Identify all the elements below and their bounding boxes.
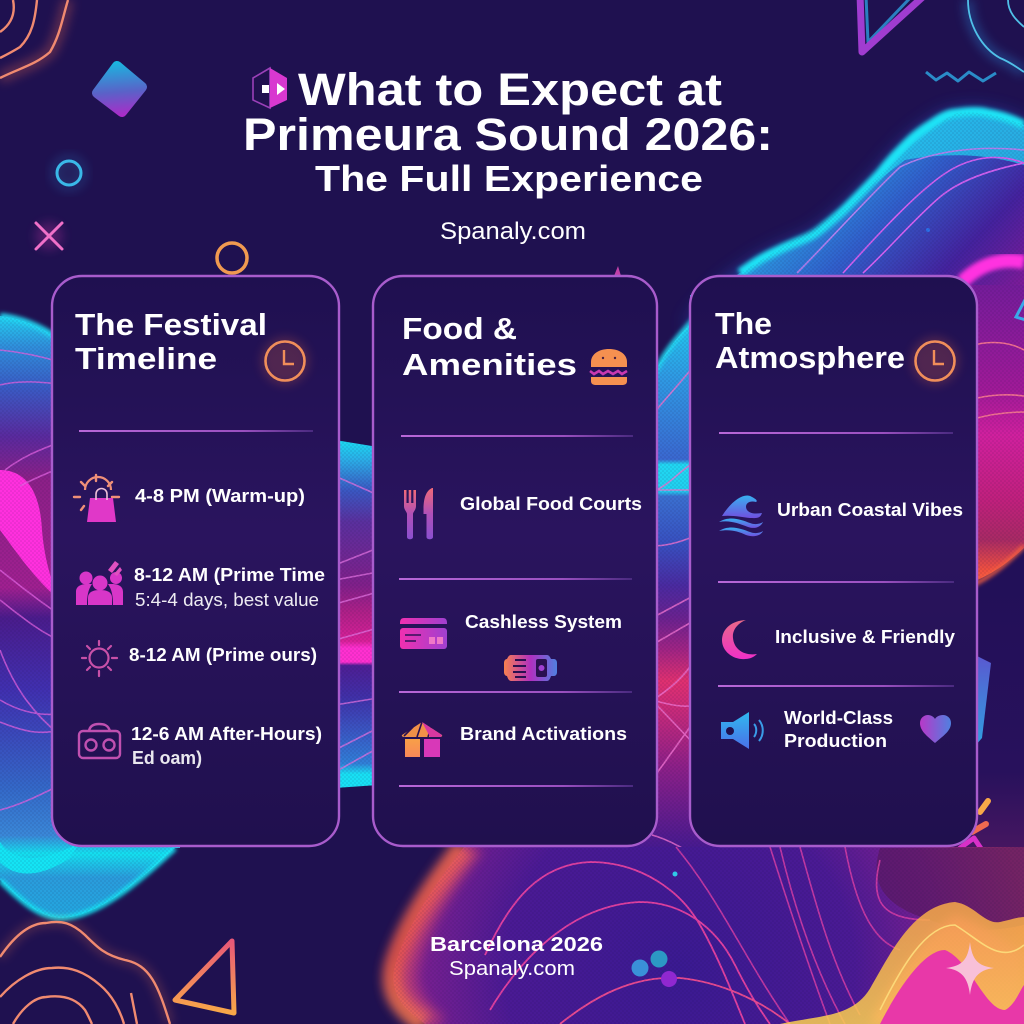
icon: heart (920, 715, 951, 743)
title: What to Expect at (298, 64, 722, 115)
decoration: outlined triangle bottom left (175, 941, 234, 1013)
footer: location and site (430, 934, 603, 980)
text: prime time hours: 5:4-4 days, best value (135, 590, 319, 610)
neon wave: yellow peak lower right (780, 902, 1024, 1024)
icon: market tent (402, 722, 442, 757)
text: world-class production: World-Class (784, 708, 893, 728)
icon: crescent moon (722, 620, 757, 659)
neon wave: left edge (0, 316, 180, 918)
text: world-class production: Production (784, 731, 887, 751)
text: prime hours: 8-12 AM (Prime ours) (129, 645, 317, 665)
heading: food and amenities: Food & (402, 311, 517, 346)
icon: clock (261, 337, 309, 385)
footer: location and site: Barcelona 2026 (430, 934, 603, 956)
icon: festival logo hexagon (253, 68, 287, 108)
text: world-class production (784, 708, 893, 751)
decoration: coloured dots (632, 872, 678, 987)
icon: ticket wristband (504, 655, 557, 681)
icon: fork and knife (404, 488, 433, 539)
decoration: blue contour lines top right (968, 0, 1024, 72)
decoration: blue triangle at right edge (1016, 298, 1024, 320)
decoration: orange and magenta cross (960, 801, 988, 850)
decoration: salmon contour lines bottom left (0, 922, 170, 1024)
text: warm-up hours: 4-8 PM (Warm-up) (135, 486, 305, 506)
heading: the festival timeline: The Festival (75, 307, 267, 342)
heading: food and amenities: Amenities (402, 347, 577, 382)
icon: ocean wave (719, 496, 763, 536)
icon: sun (82, 641, 117, 676)
panel: food and amenities (373, 276, 657, 846)
text: brand activations: Brand Activations (460, 724, 627, 744)
neon wave: bottom orange blob (393, 847, 1024, 1024)
decoration: glowing blue ring (54, 158, 84, 188)
decoration: small pink spike above second card (614, 266, 621, 276)
icon: sun and shopping bag (74, 475, 119, 522)
neon wave: right edge (940, 261, 1024, 900)
text: after-hours: Ed oam) (132, 748, 202, 768)
decoration: glowing pink cross (35, 222, 63, 250)
text: after-hours: 12-6 AM After-Hours) (131, 724, 322, 744)
text: urban coastal vibes: Urban Coastal Vibes (777, 500, 963, 520)
text: cashless system: Cashless System (465, 612, 622, 632)
icon: sparkle (946, 942, 994, 995)
icon: loudspeaker (721, 712, 763, 749)
text: global food courts: Global Food Courts (460, 494, 642, 514)
decoration: blue zigzag (926, 72, 996, 81)
heading: food and amenities (402, 311, 577, 382)
icon: burger (590, 349, 627, 385)
title: Primeura Sound 2026: (243, 109, 773, 160)
neon wave: gutter between first and second panels (335, 440, 378, 788)
text: after-hours (131, 724, 322, 768)
text: inclusive and friendly: Inclusive & Friendly (775, 627, 955, 647)
title (243, 64, 773, 199)
heading: the festival timeline (75, 307, 267, 376)
icon: boombox (79, 724, 120, 758)
text: prime time hours: 8-12 AM (Prime Time (134, 565, 325, 585)
icon: clock (911, 337, 959, 385)
text: prime time hours (134, 565, 325, 610)
heading: the atmosphere: Atmosphere (715, 340, 905, 375)
icon: payment card (400, 618, 447, 649)
decoration: salmon contour lines top left (0, 0, 68, 78)
decoration: rounded gradient diamond (97, 66, 142, 112)
panel: the atmosphere (690, 276, 977, 846)
footer: location and site: Spanaly.com (449, 958, 575, 980)
subtitle: site name: Spanaly.com (440, 218, 586, 245)
title: The Full Experience (315, 158, 703, 199)
heading: the atmosphere (715, 306, 905, 375)
heading: the festival timeline: Timeline (75, 341, 217, 376)
icon: crowd of people (76, 561, 123, 605)
decoration: purple triangle top right (860, 0, 926, 52)
decoration: orange ring (217, 243, 247, 273)
neon wave: gutter between second and third panels (620, 290, 725, 855)
decoration: blue panel behind third card (975, 655, 991, 746)
neon wave: upper right (690, 112, 1024, 330)
panel: festival timeline (52, 276, 339, 846)
heading: the atmosphere: The (715, 306, 772, 341)
